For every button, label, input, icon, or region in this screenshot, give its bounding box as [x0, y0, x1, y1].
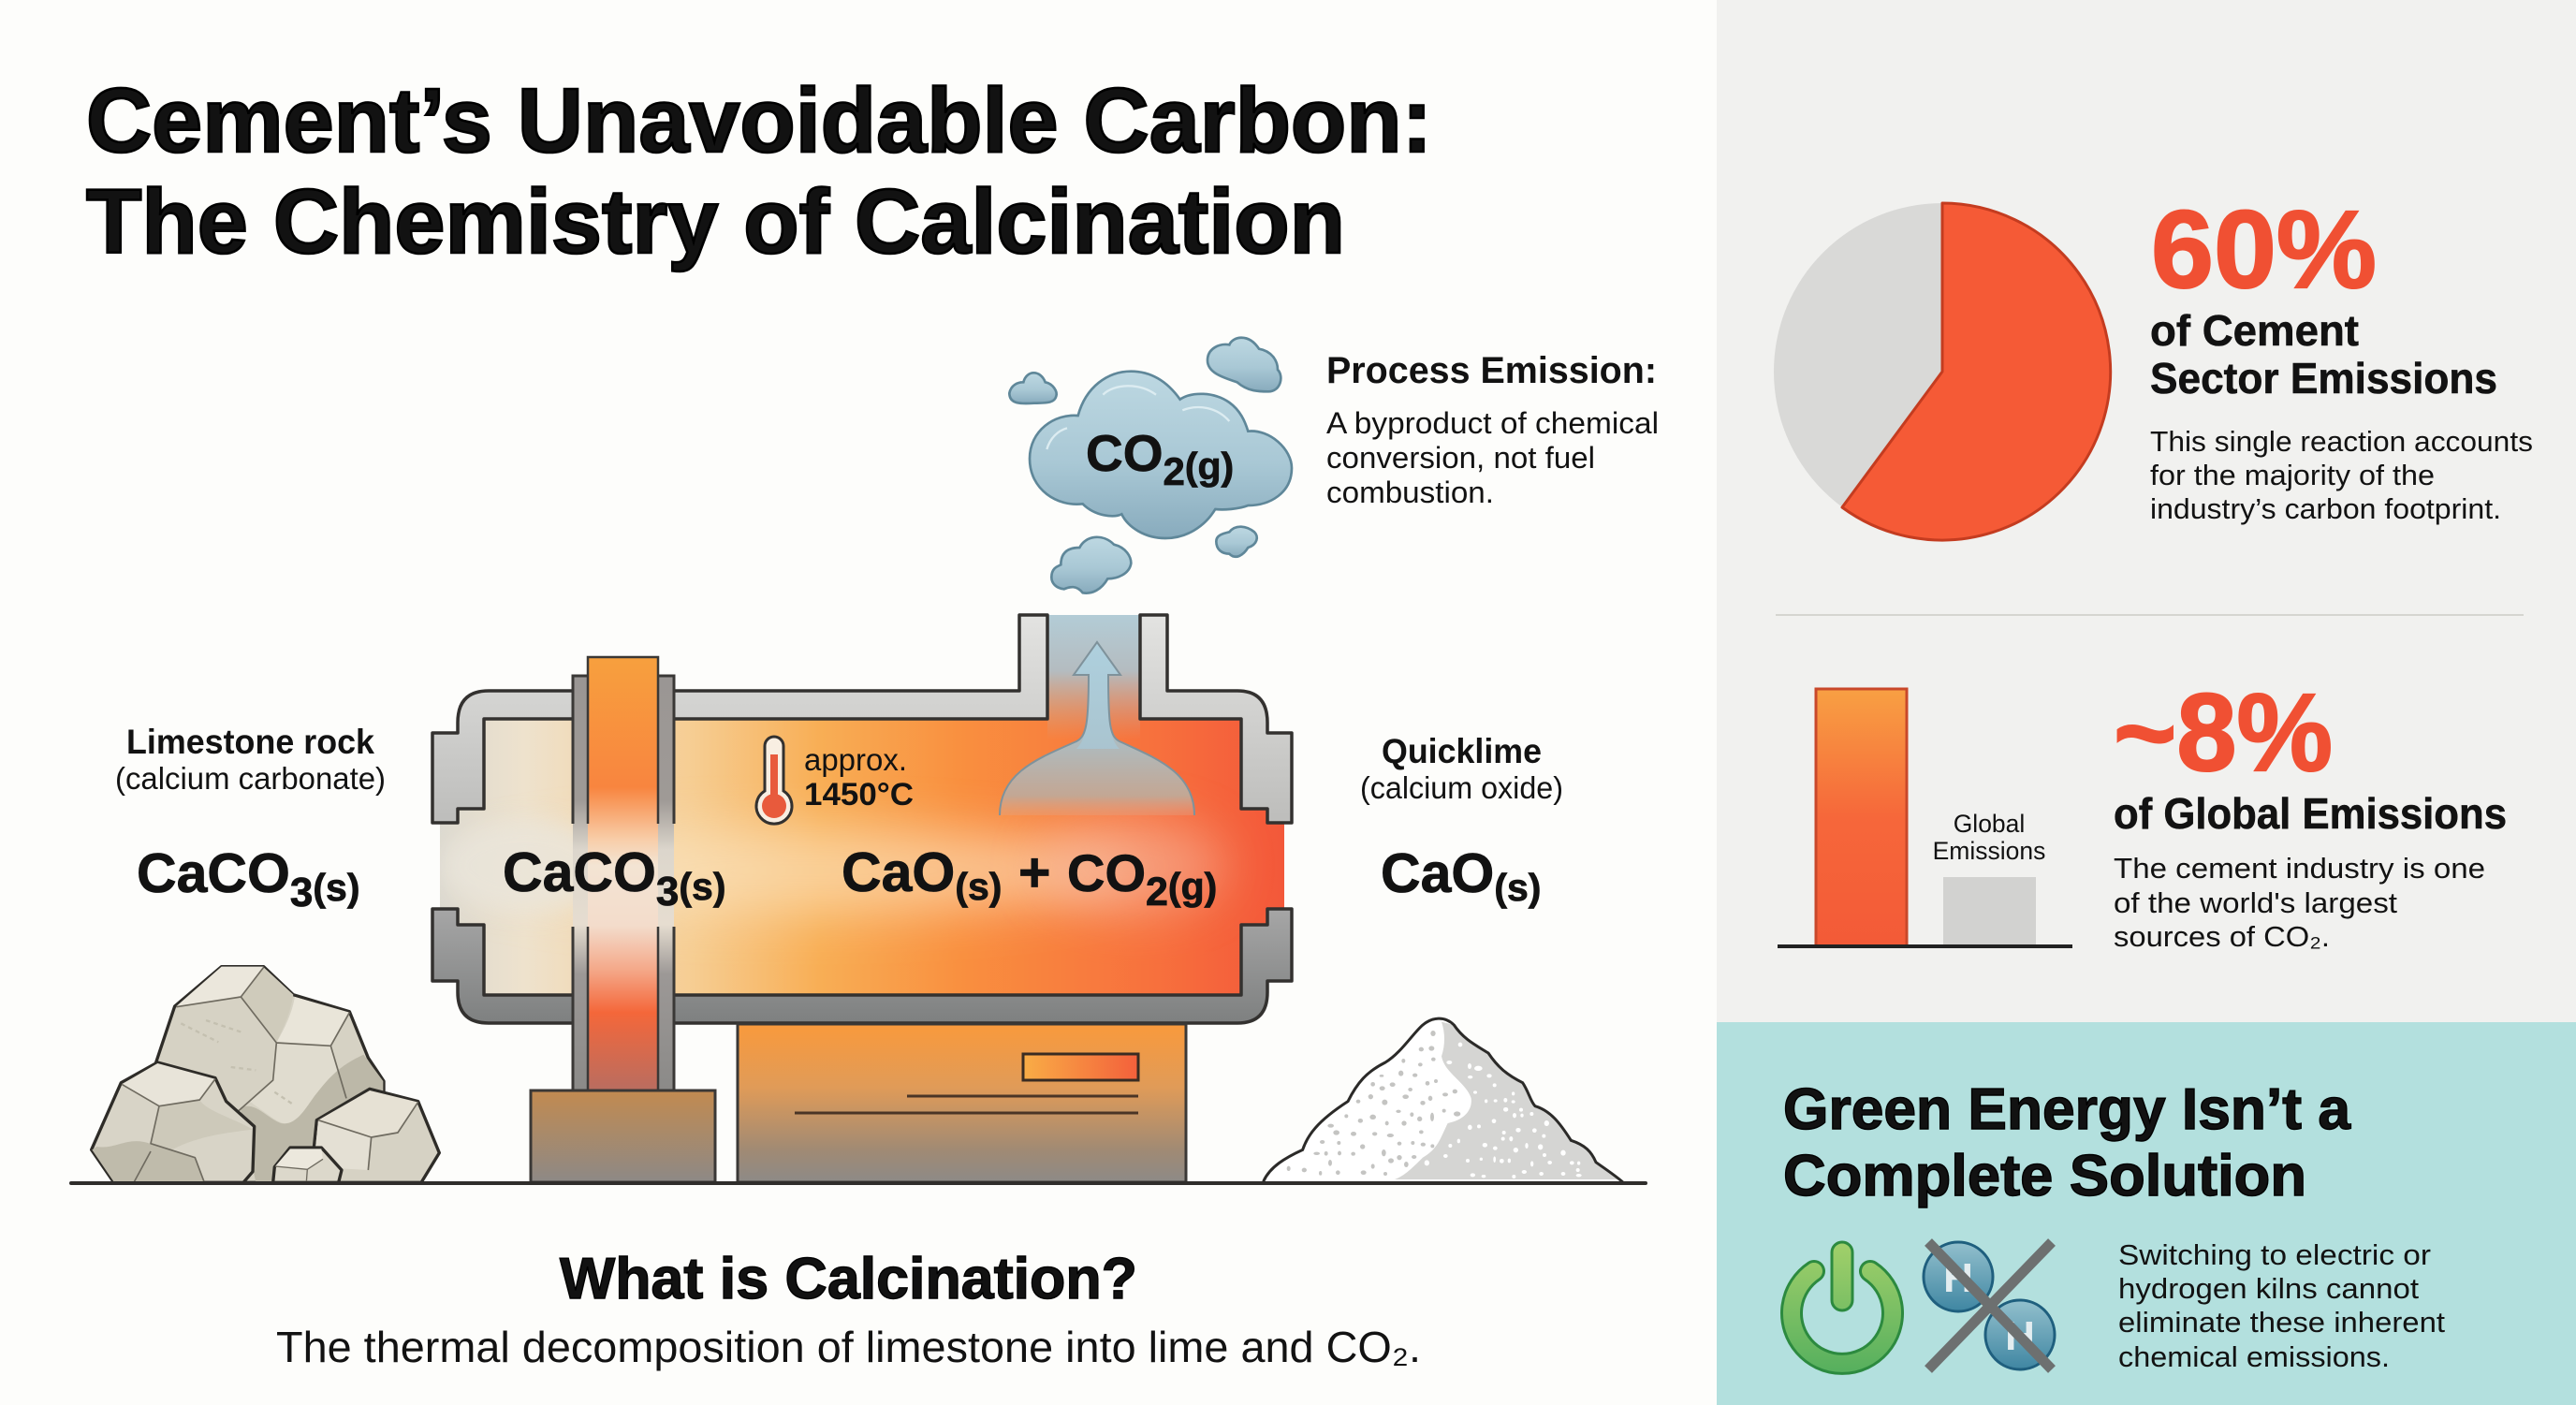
kiln diagram	[431, 608, 1301, 1182]
label: limestone rock: (calcium carbonate)	[115, 761, 386, 796]
formula: quicklime: (s)	[1494, 866, 1541, 909]
stat text: global emissions: of the world's largest	[2114, 886, 2397, 919]
formula: products inside kiln: (s)	[955, 865, 1002, 908]
text: green energy explanation: Switching to electric or	[2118, 1238, 2431, 1271]
formula: limestone: (s)	[313, 866, 360, 909]
callout: process emission: Process Emission:	[1326, 350, 1657, 391]
stat text: global emissions: The cement industry is one	[2114, 852, 2485, 885]
icon: quicklime pile	[1264, 1018, 1622, 1182]
label: quicklime: Quicklime	[1382, 732, 1542, 770]
stat text: global emissions	[2114, 852, 2485, 953]
formula: reactant inside kiln: 3	[656, 869, 679, 915]
label: limestone rock	[115, 723, 386, 796]
title: The Chemistry of Calcination	[86, 170, 1345, 272]
formula: reactant inside kiln: CaCO	[503, 842, 656, 903]
stat: 8 percent: ~8%	[2114, 671, 2333, 795]
stat text: cement sector: for the majority of the	[2150, 459, 2435, 491]
stat text: global emissions: sources of CO₂.	[2114, 920, 2330, 953]
icon: limestone rocks	[92, 967, 439, 1182]
bar label	[1933, 810, 2045, 865]
stat text: cement sector: This single reaction accounts	[2150, 425, 2533, 458]
text: green energy explanation: chemical emissions.	[2118, 1340, 2390, 1373]
firebox	[738, 1024, 1186, 1182]
stat heading: global emissions: of Global Emissions	[2114, 789, 2507, 838]
CO2 gas formula: (g)	[1185, 445, 1234, 488]
pipe base	[531, 1090, 715, 1182]
ground line	[69, 1181, 1647, 1185]
text: green energy explanation: eliminate these inherent	[2118, 1306, 2445, 1339]
callout: process emission: combustion.	[1326, 476, 1494, 509]
temperature label	[804, 742, 914, 812]
temperature label: 1450°C	[804, 777, 914, 812]
kiln interior heat	[431, 608, 1301, 1002]
icon: power symbol	[1792, 1242, 1893, 1364]
chart: 60% pie	[1774, 203, 2111, 540]
formula: products inside kiln: 2	[1146, 870, 1168, 915]
formula: products inside kiln: (g)	[1168, 865, 1217, 908]
formula: products inside kiln	[842, 842, 1217, 915]
temperature label: approx.	[804, 742, 907, 777]
formula: products inside kiln: +	[1018, 842, 1050, 903]
formula: limestone: CaCO	[137, 842, 290, 904]
icon: crossed-out hydrogen: H	[1943, 1255, 1973, 1301]
heading: what is calcination: What is Calcination?	[560, 1247, 1137, 1311]
stat heading: cement sector	[2150, 306, 2497, 402]
title	[86, 69, 1432, 272]
callout: process emission	[1326, 350, 1659, 509]
callout: process emission: A byproduct of chemical	[1326, 406, 1659, 440]
icon: crossed-out hydrogen	[1924, 1242, 2055, 1369]
title: Cement’s Unavoidable Carbon:	[86, 69, 1432, 171]
exhaust plume arrow	[1000, 642, 1194, 815]
stat: 60 percent: 60%	[2151, 188, 2377, 312]
heading: green energy	[1783, 1077, 2351, 1208]
stat heading: cement sector: Sector Emissions	[2150, 354, 2497, 402]
label: limestone rock: Limestone rock	[126, 723, 374, 761]
stat text: cement sector: industry’s carbon footprint.	[2150, 492, 2501, 525]
kiln walls	[432, 615, 1292, 1023]
formula: products inside kiln: CO	[1067, 843, 1146, 902]
icon: crossed-out hydrogen: H	[2005, 1313, 2035, 1359]
feed pipe	[573, 657, 674, 1090]
callout: process emission: conversion, not fuel	[1326, 441, 1595, 475]
stat text: cement sector	[2150, 425, 2533, 525]
icon: thermometer	[756, 737, 792, 824]
heading: green energy: Green Energy Isn’t a	[1783, 1077, 2351, 1142]
text: green energy explanation	[2118, 1238, 2445, 1373]
stat heading: cement sector: of Cement	[2150, 306, 2359, 355]
heading: green energy: Complete Solution	[1783, 1144, 2306, 1208]
label: quicklime: (calcium oxide)	[1360, 770, 1563, 805]
text: green energy explanation: hydrogen kilns cannot	[2118, 1272, 2419, 1305]
CO2 gas formula: CO	[1086, 424, 1163, 482]
panel: green energy background	[1717, 1022, 2576, 1405]
chart: global emissions bars	[1778, 689, 2072, 948]
label: quicklime	[1360, 732, 1563, 805]
definition text: The thermal decomposition of limestone into lime and CO₂.	[276, 1323, 1421, 1371]
formula: limestone: 3	[290, 870, 313, 915]
bar label: Global	[1954, 810, 2025, 838]
CO2 gas formula: 2	[1163, 449, 1185, 493]
formula: reactant inside kiln: (s)	[679, 865, 726, 908]
formula: quicklime: CaO	[1381, 842, 1494, 904]
bar label: Emissions	[1933, 837, 2045, 865]
formula: products inside kiln: CaO	[842, 842, 955, 903]
panel: statistics background	[1717, 0, 2576, 1022]
icon: CO2 clouds	[1009, 338, 1292, 593]
